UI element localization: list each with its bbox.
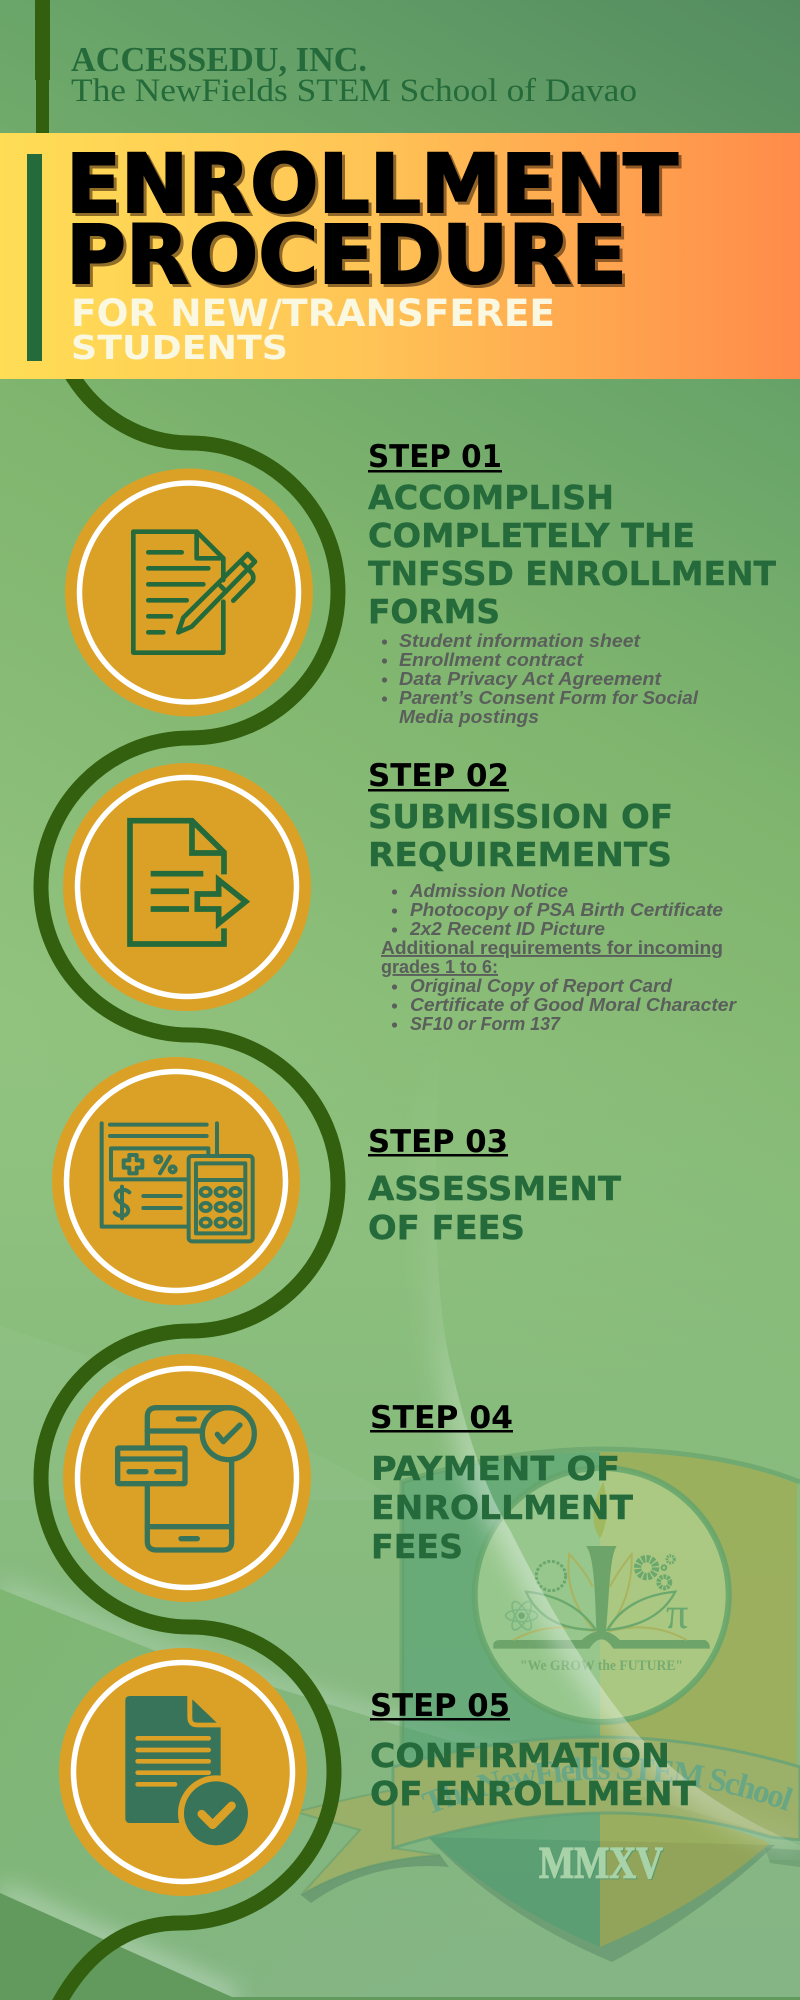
step 5 heading: OF ENROLLMENT <box>370 1774 697 1813</box>
step 2 label: STEP 02 <box>368 758 509 794</box>
step 4 heading: PAYMENT OF <box>371 1449 620 1488</box>
emblem drawing <box>493 1482 710 1649</box>
ribbon <box>393 1737 800 1848</box>
main title <box>66 138 678 303</box>
shield outline <box>402 1449 800 1760</box>
banner accent bar <box>27 154 42 361</box>
header vertical bar <box>35 0 50 133</box>
step 3 heading <box>368 1169 621 1247</box>
step 1 heading: FORMS <box>368 592 500 631</box>
school name: The NewFields STEM School of Davao <box>71 73 637 109</box>
step 1 heading <box>368 478 776 631</box>
subtitle: STUDENTS <box>71 328 288 367</box>
step 2 requirements list: Additional requirements for incoming <box>381 938 723 958</box>
shield green half <box>402 1452 600 1947</box>
step 2 heading: REQUIREMENTS <box>368 835 672 874</box>
step 2 requirements list: Photocopy of PSA Birth Certificate <box>410 900 723 920</box>
step 2 requirements list: 2x2 Recent ID Picture <box>409 919 605 939</box>
step 1 text <box>368 439 776 727</box>
title banner <box>0 133 800 379</box>
step 2 icon: document with arrow <box>63 763 311 1011</box>
subtitle: FOR NEW/TRANSFEREE <box>71 292 555 335</box>
step 2 requirements list: grades 1 to 6: <box>381 957 498 977</box>
step 1 bullet list: Parent’s Consent Form for Social <box>399 688 699 708</box>
step 3 text <box>368 1124 621 1247</box>
step 5 text <box>370 1688 697 1813</box>
main title: PROCEDURE <box>66 209 627 303</box>
organisation name: ACCESSEDU, INC. <box>71 40 367 79</box>
step 2 text <box>368 758 737 1034</box>
shield yellow half <box>600 1452 797 1947</box>
background light sweep <box>430 1251 800 1858</box>
step 3 heading: ASSESSMENT <box>368 1169 621 1208</box>
step 4 heading <box>371 1449 633 1566</box>
step 2 requirements list: Admission Notice <box>409 881 568 901</box>
step 2 requirements list: Certificate of Good Moral Character <box>410 995 737 1015</box>
step 4 heading: ENROLLMENT <box>371 1488 633 1527</box>
step 5 label: STEP 05 <box>370 1688 510 1724</box>
emblem motto: "We GROW the FUTURE" <box>520 1658 683 1674</box>
step 5 heading <box>370 1736 697 1813</box>
step 2 heading: SUBMISSION OF <box>368 797 673 836</box>
step 2 heading <box>368 797 673 874</box>
ribbon tails <box>296 1790 800 1903</box>
step 1 label: STEP 01 <box>368 439 502 475</box>
subtitle <box>71 292 555 367</box>
step 4 icon: phone payment <box>63 1354 311 1602</box>
step 1 bullet list: Media postings <box>399 707 539 727</box>
step 2 requirements list: SF10 or Form 137 <box>410 1014 561 1034</box>
main title: ENROLLMENT <box>66 138 678 232</box>
pi symbol: π <box>666 1589 688 1638</box>
step 1 heading: TNFSSD ENROLLMENT <box>368 554 776 593</box>
winding path connector <box>41 372 338 2000</box>
step 3 label: STEP 03 <box>368 1124 508 1160</box>
emblem circle <box>475 1468 729 1722</box>
step 1 heading: COMPLETELY THE <box>368 516 695 555</box>
step 4 heading: FEES <box>371 1527 463 1566</box>
step 1 bullet list: Data Privacy Act Agreement <box>399 669 662 689</box>
step 1 bullet list: Enrollment contract <box>399 650 584 670</box>
step 1 icon: form and pen <box>65 468 313 716</box>
step 2 requirements list <box>381 881 737 1034</box>
step 1 bullet list: Student information sheet <box>399 631 641 651</box>
school logo watermark <box>300 1446 800 1962</box>
step 1 heading: ACCOMPLISH <box>368 478 614 517</box>
step 4 label: STEP 04 <box>370 1400 513 1436</box>
ribbon school name: The NewFields STEM School <box>421 1756 793 1813</box>
step 5 heading: CONFIRMATION <box>370 1736 670 1775</box>
step 4 text <box>370 1400 633 1566</box>
shield shadow <box>428 1837 775 1962</box>
school name header <box>71 40 637 109</box>
step 2 requirements list: Original Copy of Report Card <box>410 976 673 996</box>
MMXV: MMXV <box>539 1838 663 1888</box>
step 1 bullet list <box>382 631 699 727</box>
step 5 icon: confirmed document <box>59 1648 307 1896</box>
step 3 icon: invoice and calculator <box>52 1057 300 1305</box>
step 3 heading: OF FEES <box>368 1208 525 1247</box>
